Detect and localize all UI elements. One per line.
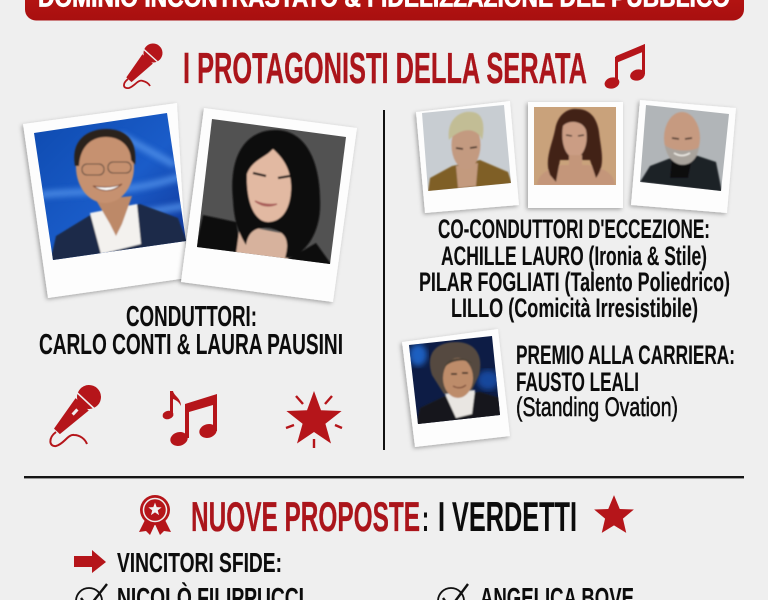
- heading: nuove proposte: NUOVE PROPOSTE: [191, 493, 420, 540]
- icon: star with rays: [286, 391, 342, 448]
- icon: arrow: [74, 550, 106, 573]
- text: conduttori: CARLO CONTI & LAURA PAUSINI: [39, 329, 343, 361]
- icon: check left: [76, 584, 107, 600]
- polaroid: Carlo Conti: [23, 103, 190, 298]
- polaroid: Lillo: [631, 100, 736, 213]
- text: premio alla carriera: (Standing Ovation): [516, 392, 678, 422]
- icon: large music notes: [162, 391, 218, 448]
- icon: check right: [438, 584, 468, 600]
- text: co-conduttori: [419, 214, 730, 323]
- icon: award rosette: [139, 495, 171, 535]
- icon: music note, heading: [603, 44, 646, 90]
- polaroid: Pilar Fogliati: [528, 102, 623, 208]
- heading: nuove proposte: :: [422, 498, 429, 539]
- vertical divider: [383, 110, 385, 450]
- horizontal divider: [24, 476, 744, 478]
- icon: large microphone: [48, 380, 106, 446]
- text: vincitori sfide: VINCITORI SFIDE:: [117, 547, 282, 578]
- polaroid: Achille Lauro: [415, 100, 519, 213]
- text: conduttori: CONDUTTORI:: [126, 301, 257, 333]
- text: premio alla carriera: FAUSTO LEALI: [516, 367, 639, 397]
- heading: nuove proposte: I VERDETTI: [438, 493, 577, 540]
- icon: microphone, heading: [122, 40, 166, 88]
- polaroid: Laura Pausini: [181, 108, 357, 302]
- text: conduttori: [39, 301, 343, 361]
- top banner: [25, 0, 744, 20]
- icon: star, heading: [594, 495, 634, 533]
- polaroid: Fausto Leali: [402, 329, 510, 447]
- text: premio alla carriera: [516, 340, 735, 422]
